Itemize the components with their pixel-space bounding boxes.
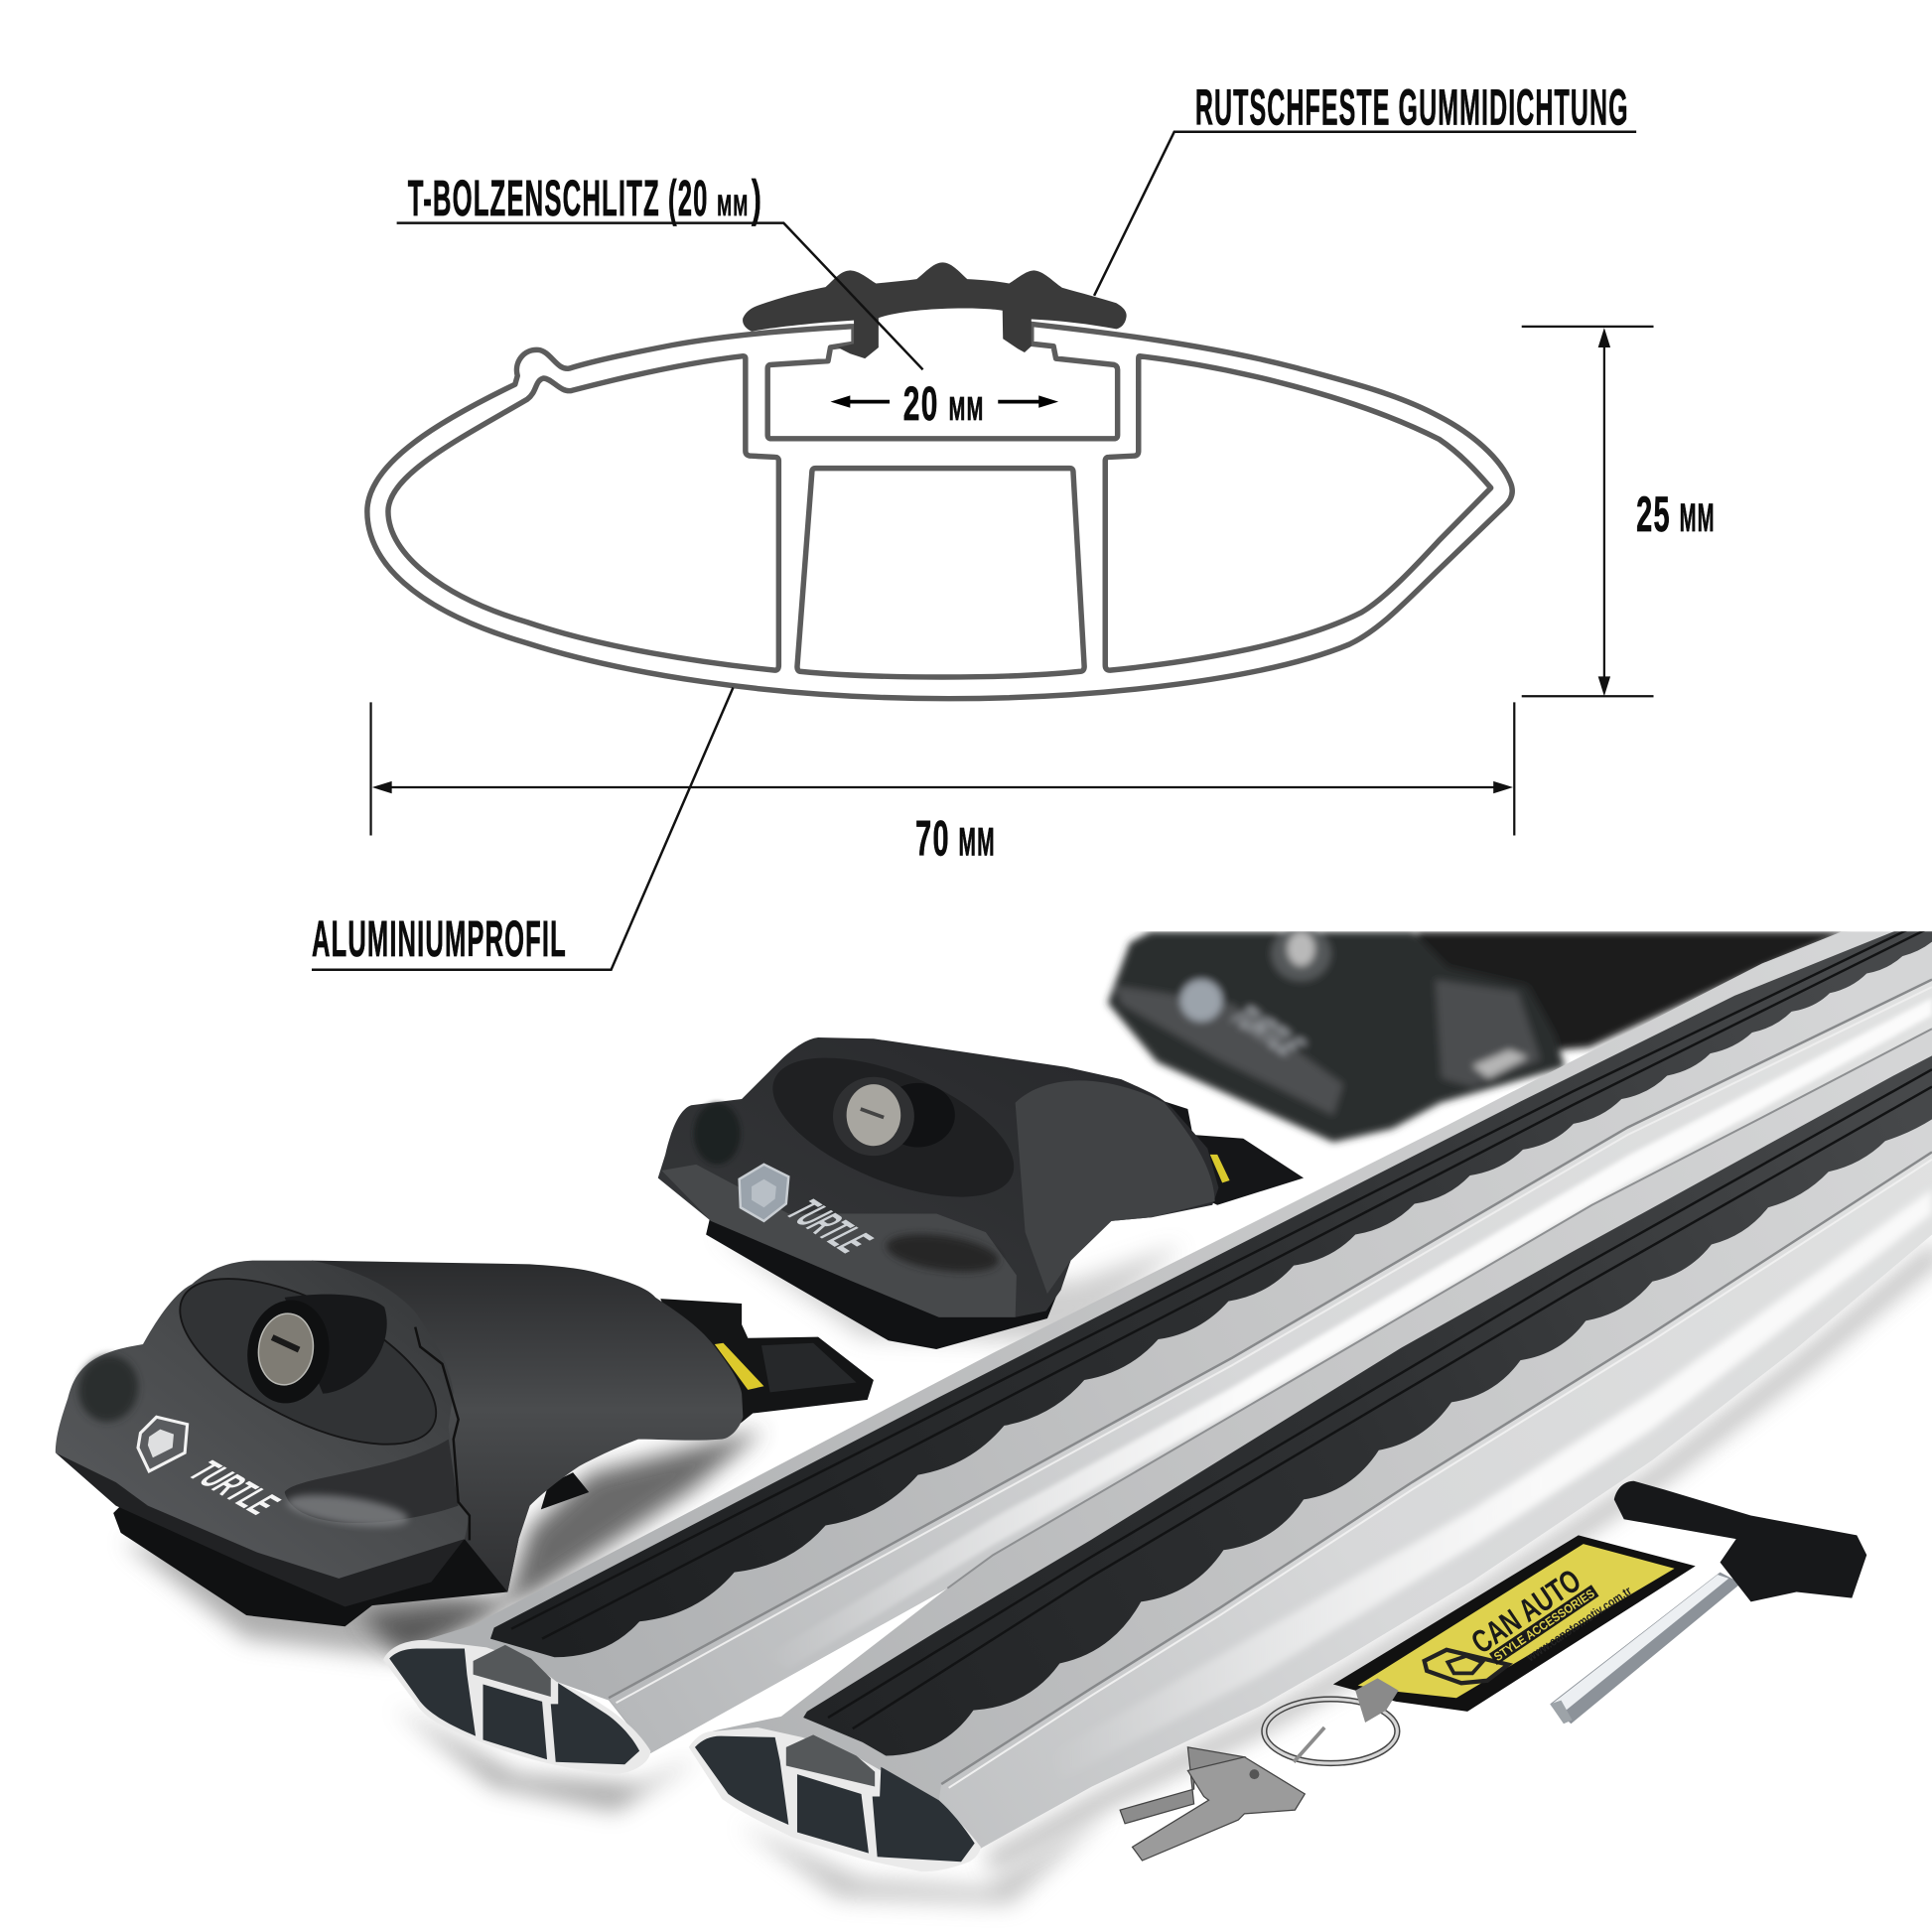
lock knob <box>900 1083 955 1148</box>
back key <box>1120 1747 1244 1824</box>
mounting foot middle: TURTLE <box>774 1194 885 1259</box>
right chamber <box>1105 356 1491 670</box>
strap and yellow tab <box>1157 1099 1304 1205</box>
aluminium profile outer wall <box>367 324 1512 699</box>
further foot behind <box>1417 931 1849 1059</box>
left dent <box>72 1350 144 1428</box>
rubber strip <box>803 1044 1932 1756</box>
rubber ribs <box>511 918 1932 1639</box>
mounting foot near: TURTLE <box>178 1454 292 1520</box>
keys <box>1120 1747 1305 1861</box>
front plate <box>56 1261 470 1579</box>
end cap rim <box>383 1640 650 1774</box>
black pad under foot <box>113 1507 518 1626</box>
ridge line <box>609 980 1932 1698</box>
dimension: height 25 mm: MM <box>1680 496 1716 540</box>
mounting foot far (blurred) <box>1108 926 1849 1142</box>
bar body <box>425 931 1932 1753</box>
pocket and highlight <box>285 1440 459 1523</box>
dimension: width 70 mm <box>371 702 1514 866</box>
tag logo <box>1425 1650 1508 1683</box>
product photo illustration <box>56 918 1932 1903</box>
lock cylinder <box>258 1312 314 1386</box>
roof bar front <box>689 1029 1932 1871</box>
seam between bars <box>947 1029 1932 1588</box>
hex rod <box>1550 1573 1741 1724</box>
dimension: height 25 mm <box>1522 327 1716 696</box>
lower band <box>939 1152 1932 1849</box>
rear stub <box>541 1472 589 1509</box>
logo <box>740 1165 788 1221</box>
label: T-Bolzenschlitz: ) <box>752 170 762 226</box>
mounting foot near <box>56 1245 874 1626</box>
lid seam <box>415 1327 470 1540</box>
lock cylinder <box>847 1084 900 1146</box>
rubber strip <box>490 924 1932 1657</box>
body silhouette <box>308 1261 743 1591</box>
front band <box>661 1165 1017 1317</box>
front band <box>1115 986 1343 1115</box>
key tag <box>1333 1535 1696 1712</box>
logo <box>138 1417 188 1471</box>
label: Aluminiumprofil <box>312 688 733 970</box>
tag text: STYLE ACCESSORIES <box>1491 1587 1597 1664</box>
black strap bracket <box>660 1299 874 1424</box>
label: T-Bolzenschlitz: MM <box>717 190 750 222</box>
label: T-Bolzenschlitz: T-BOLZENSCHLITZ (20 <box>408 170 709 226</box>
T-handle hex key <box>1550 1481 1866 1724</box>
end cap slot <box>474 1645 551 1697</box>
dimension: width 70 mm: MM <box>959 820 996 864</box>
bright band <box>609 980 1932 1753</box>
label: T-Bolzenschlitz <box>397 170 923 369</box>
end cap rim <box>689 1727 981 1871</box>
lid <box>179 1278 437 1446</box>
end cap chambers <box>695 1736 975 1862</box>
rubber ribs <box>828 1069 1932 1728</box>
mounting foot far (blurred): TURTLE <box>1219 1003 1314 1059</box>
dimension: slot width 20 mm <box>830 377 1058 431</box>
logo <box>1180 980 1222 1022</box>
key ring <box>1264 1678 1399 1763</box>
pockets <box>885 1231 1001 1275</box>
end cap slot <box>786 1734 875 1787</box>
foot shell <box>1108 931 1565 1142</box>
dimension: slot width 20 mm: 20 <box>903 377 939 431</box>
label: Aluminiumprofil: ALUMINIUMPROFIL <box>312 910 567 967</box>
end cap chambers <box>389 1649 639 1764</box>
right body <box>1016 1080 1215 1294</box>
label: Rutschfeste Gummidichtung <box>1094 78 1636 296</box>
mounting foot middle <box>658 1030 1304 1349</box>
left chamber <box>388 356 778 670</box>
lock <box>1272 926 1330 981</box>
lock knob <box>285 1295 387 1394</box>
roof bar rear <box>383 918 1932 1774</box>
lid <box>772 1058 1014 1197</box>
rubber seal on profile <box>743 262 1127 358</box>
rod end <box>1550 1701 1573 1724</box>
ridge line <box>941 1152 1932 1784</box>
handle <box>1614 1481 1866 1601</box>
bar body <box>712 1029 1932 1849</box>
dimension: width 70 mm: 70 <box>915 810 950 866</box>
profile cross-section diagram <box>367 78 1716 866</box>
base band <box>56 1452 465 1606</box>
front key <box>1133 1757 1305 1861</box>
tag text: CAN AUTO <box>1465 1562 1587 1661</box>
body highlight <box>1436 980 1540 1087</box>
tag text: www.canotomotiv.com.tr <box>1524 1584 1634 1665</box>
foot shell <box>658 1037 1218 1317</box>
dimension: slot width 20 mm: MM <box>949 391 985 428</box>
pad under foot <box>706 1213 1070 1349</box>
dimension: height 25 mm: 25 <box>1636 486 1671 542</box>
ground shadows <box>123 1232 1932 1903</box>
centre chamber <box>797 469 1084 677</box>
